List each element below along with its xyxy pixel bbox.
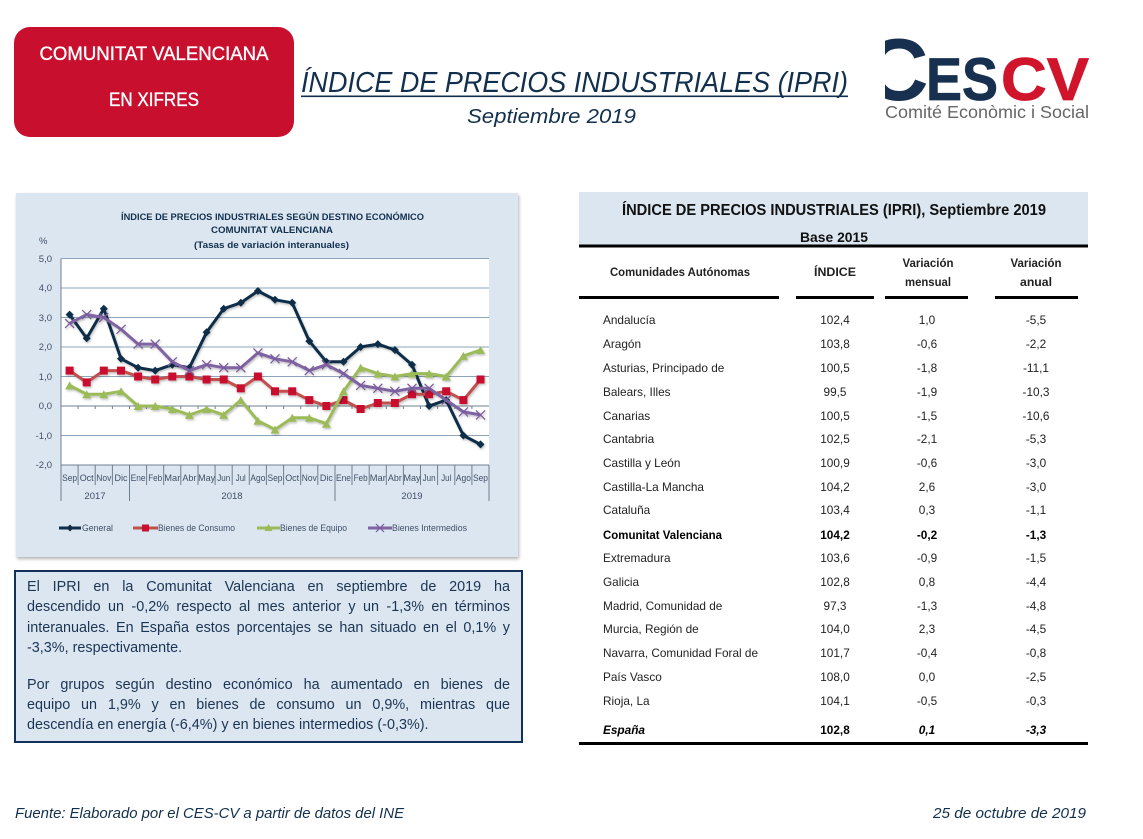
x axis month and year labels: Sep <box>473 473 488 484</box>
table rows: Comunitat Valenciana <box>603 528 722 542</box>
footer: date: 25 de octubre de 2019 <box>932 805 1087 822</box>
table rows: España <box>603 723 645 737</box>
table rows: Rioja, La <box>603 694 650 708</box>
x axis month and year labels: Ene <box>336 473 351 484</box>
table rows: -2,5 <box>1026 670 1047 684</box>
text box: commentary <box>15 571 522 742</box>
table rows: 103,4 <box>820 503 850 517</box>
table rows: Canarias <box>603 409 650 423</box>
table rows: 0,0 <box>919 670 936 684</box>
table rows: 108,0 <box>820 670 850 684</box>
table rows: -4,8 <box>1026 599 1047 613</box>
table rows: 2,6 <box>919 480 936 494</box>
table rows: 102,5 <box>820 432 850 446</box>
table rows: Extremadura <box>603 551 671 565</box>
panel: data table <box>579 192 1088 745</box>
text box: commentary: -3,3%, respectivamente. <box>27 640 182 656</box>
table rows: -2,2 <box>1026 337 1046 351</box>
y axis labels: % <box>39 236 48 247</box>
main title: ÍNDICE DE PRECIOS INDUSTRIALES (IPRI) <box>301 67 848 99</box>
table column headers: anual <box>1020 275 1052 289</box>
table rows: 104,2 <box>820 528 850 542</box>
x axis month and year labels: Abr <box>182 473 196 484</box>
text box: commentary: descendía en energía (-6,4%) y en bienes intermedios (-0,3%). <box>27 717 429 733</box>
table heading <box>579 192 1088 248</box>
table rows: -0,4 <box>917 646 938 660</box>
table rows: -10,6 <box>1023 409 1050 423</box>
table rows: -11,1 <box>1023 361 1049 375</box>
table column headers: Comunidades Autónomas <box>610 265 750 279</box>
x axis month and year labels: Jul <box>236 473 246 484</box>
table rows: 102,4 <box>820 313 850 327</box>
table rows: 103,6 <box>820 551 850 565</box>
footer: source: Fuente: Elaborado por el CES-CV a partir de datos del INE <box>15 805 405 822</box>
table rows: 0,1 <box>919 723 935 737</box>
table rows: Galicia <box>603 575 639 589</box>
table rows: Asturias, Principado de <box>603 361 725 375</box>
text box: commentary: descendido un -0,2% respecto al mes anterior y un -1,3% en términos <box>27 599 510 615</box>
table rows: 102,8 <box>820 723 850 737</box>
table rows: 100,5 <box>820 409 850 423</box>
y axis labels: 4,0 <box>39 283 52 294</box>
chart legend: Bienes de Consumo <box>158 523 235 533</box>
x axis month and year labels: Feb <box>148 473 162 484</box>
x axis month and year labels: 2019 <box>401 491 423 502</box>
x axis month and year labels: May <box>198 473 215 484</box>
table rows: 0,8 <box>919 575 936 589</box>
table rows: -3,0 <box>1026 456 1047 470</box>
series: Bienes Intermedios <box>70 315 480 415</box>
table rows: -5,5 <box>1026 313 1047 327</box>
table rows: -1,3 <box>1026 528 1047 542</box>
chart legend: General <box>82 523 113 533</box>
table rows: -5,3 <box>1026 432 1047 446</box>
table rows: País Vasco <box>603 670 662 684</box>
table rows: Cantabria <box>603 432 655 446</box>
table rows: 1,0 <box>919 313 936 327</box>
panel: line chart <box>16 193 518 557</box>
table rows: Andalucía <box>603 313 656 327</box>
x axis month and year labels: Ago <box>250 473 265 484</box>
table rows: Castilla-La Mancha <box>603 480 704 494</box>
text box: commentary: interanuales. En España estos porcentajes se han situado en el 0,1% y <box>27 620 510 636</box>
x axis month and year labels: Jun <box>423 473 436 484</box>
table rows: 102,8 <box>820 575 850 589</box>
table rows: Madrid, Comunidad de <box>603 599 723 613</box>
table heading: Base 2015 <box>800 230 869 245</box>
table rows: 2,3 <box>919 622 936 636</box>
y axis labels: 0,0 <box>39 401 52 412</box>
table rows: -4,5 <box>1026 622 1047 636</box>
table column headers: Variación <box>902 256 954 270</box>
x axis month and year labels: Ago <box>456 473 471 484</box>
chart legend <box>59 523 467 533</box>
x axis month and year labels: Sep <box>62 473 77 484</box>
x axis month and year labels: Abr <box>388 473 402 484</box>
table rows: 100,9 <box>820 456 850 470</box>
header badge: Comunitat Valenciana en xifres: COMUNITAT VALENCIANA <box>40 44 269 65</box>
logo: CES CV: CV <box>1001 46 1089 113</box>
header badge: Comunitat Valenciana en xifres <box>14 27 294 137</box>
table rows: -0,5 <box>917 694 938 708</box>
table rows: -4,4 <box>1026 575 1047 589</box>
logo: CES CV: ES <box>926 46 998 113</box>
table rows: Balears, Illes <box>603 385 671 399</box>
x axis month and year labels: Mar <box>370 473 386 484</box>
table column headers: Variación <box>1010 256 1062 270</box>
series: Bienes de Consumo <box>70 371 480 409</box>
chart title: ÍNDICE DE PRECIOS INDUSTRIALES SEGÚN DESTINO ECONÓMICO <box>121 211 424 222</box>
x axis month and year labels: Feb <box>354 473 368 484</box>
table rows: Navarra, Comunidad Foral de <box>603 646 758 660</box>
table rows: Aragón <box>603 337 641 351</box>
x axis month and year labels: Sep <box>268 473 282 484</box>
plot area with gridlines <box>61 258 489 501</box>
table heading: ÍNDICE DE PRECIOS INDUSTRIALES (IPRI), Septiembre 2019 <box>622 202 1046 219</box>
subtitle: date: Septiembre 2019 <box>467 105 636 128</box>
table rows: 101,7 <box>820 646 850 660</box>
y axis labels: 3,0 <box>39 313 52 324</box>
table rows: Murcia, Región de <box>603 622 699 636</box>
x axis month and year labels: Oct <box>80 473 94 484</box>
table rows: -3,3 <box>1026 723 1047 737</box>
text box: commentary: Por grupos según destino económico ha aumentado en bienes de <box>27 677 510 693</box>
table column headers <box>579 256 1078 298</box>
table column headers: ÍNDICE <box>814 264 856 279</box>
table rows: 104,0 <box>820 622 850 636</box>
chart title <box>121 211 424 250</box>
x axis month and year labels: Oct <box>285 473 300 484</box>
x axis month and year labels: Ene <box>131 473 146 484</box>
table rows: -0,6 <box>917 456 938 470</box>
chart title: COMUNITAT VALENCIANA <box>211 225 333 235</box>
x axis month and year labels: Nov <box>302 473 317 484</box>
table rows: -1,5 <box>917 409 938 423</box>
header badge: Comunitat Valenciana en xifres: EN XIFRES <box>109 90 199 111</box>
chart legend: Bienes Intermedios <box>392 523 467 533</box>
table rows: 99,5 <box>824 385 847 399</box>
text box: commentary: equipo un 1,9% y en bienes de consumo un 0,9%, mientras que <box>27 697 510 713</box>
table rows: -1,3 <box>917 599 938 613</box>
table rows: Cataluña <box>603 503 651 517</box>
logo: CES CV: Comité Econòmic i Social <box>885 102 1089 122</box>
table rows: -3,0 <box>1026 480 1047 494</box>
table column headers: mensual <box>905 275 951 289</box>
y axis labels: -1,0 <box>36 431 52 442</box>
table rows: -0,3 <box>1026 694 1047 708</box>
table rows <box>603 313 1050 737</box>
table rows: -0,6 <box>917 337 938 351</box>
x axis month and year labels: Mar <box>164 473 180 484</box>
table rows: Castilla y León <box>603 456 680 470</box>
table rows: -1,1 <box>1026 503 1046 517</box>
y axis labels: 5,0 <box>39 254 52 265</box>
table rows: 104,2 <box>820 480 850 494</box>
table rows: -0,2 <box>917 528 938 542</box>
table rows: -2,1 <box>917 432 937 446</box>
x axis month and year labels: Nov <box>96 473 112 484</box>
table rows: 100,5 <box>820 361 850 375</box>
table rows: 0,3 <box>919 503 936 517</box>
table rows: 103,8 <box>820 337 850 351</box>
text box: commentary: El IPRI en la Comunitat Valenciana en septiembre de 2019 ha <box>27 579 510 595</box>
x axis month and year labels <box>62 473 488 502</box>
chart title: (Tasas de variación interanuales) <box>194 240 349 250</box>
table rows: 104,1 <box>820 694 850 708</box>
x axis month and year labels: Dic <box>114 473 128 484</box>
y axis labels: 1,0 <box>39 372 52 383</box>
table rows: -1,9 <box>917 385 937 399</box>
x axis month and year labels: 2017 <box>84 491 106 502</box>
table rows: 97,3 <box>824 599 847 613</box>
table rows: -0,9 <box>917 551 937 565</box>
table rows: -1,5 <box>1026 551 1047 565</box>
table rows: -1,8 <box>917 361 938 375</box>
table rows: -10,3 <box>1023 385 1050 399</box>
x axis month and year labels: Dic <box>320 473 333 484</box>
chart legend: Bienes de Equipo <box>280 523 347 533</box>
logo: CES CV: C <box>865 20 929 119</box>
x axis month and year labels: Jun <box>217 473 230 484</box>
x axis month and year labels: 2018 <box>221 491 243 502</box>
y axis labels: 2,0 <box>39 342 52 353</box>
x axis month and year labels: Jul <box>441 473 451 484</box>
y axis labels: -2,0 <box>36 460 52 471</box>
table rows: -0,8 <box>1026 646 1047 660</box>
y axis labels <box>36 236 52 471</box>
x axis month and year labels: May <box>404 473 421 484</box>
series: Bienes de Equipo <box>70 350 480 430</box>
logo: CES CV <box>885 38 1090 118</box>
series: General <box>70 291 480 444</box>
